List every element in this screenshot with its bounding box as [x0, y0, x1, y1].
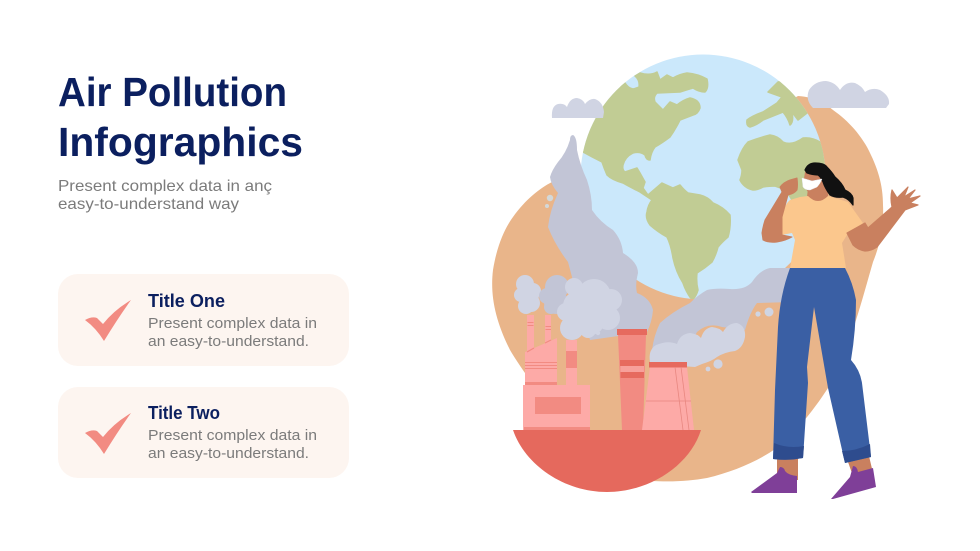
- shirt: [782, 196, 863, 268]
- subtitle: Present complex data in anç: [58, 178, 272, 195]
- subtitle: easy-to-understand way: [58, 196, 239, 213]
- icon: check mark two: [85, 413, 131, 454]
- smoke plume left: [548, 135, 653, 340]
- smoke dots left: [545, 195, 553, 208]
- smoke dots right: [755, 308, 774, 317]
- cooling tower: [642, 362, 694, 430]
- card text one: an easy-to-understand.: [148, 333, 309, 350]
- icon: check mark one: [85, 300, 131, 341]
- continent: the Americas: [583, 71, 731, 299]
- striped chimney tower: [617, 329, 647, 430]
- arm: right: [847, 187, 920, 251]
- card text two: Present complex data in: [148, 427, 317, 444]
- hair: [805, 163, 853, 205]
- ankles: [777, 456, 873, 480]
- title: [58, 69, 303, 165]
- card heading two: Title Two: [148, 403, 220, 423]
- illustration: woman wearing a mask: [751, 163, 920, 499]
- cloud: low right: [650, 323, 745, 367]
- continent: Africa: [737, 134, 825, 200]
- card text two: [148, 427, 317, 462]
- mask: [802, 178, 822, 190]
- illustration: pollution scene: [492, 54, 889, 492]
- shoe: left: [751, 467, 797, 493]
- card heading one: Title One: [148, 291, 225, 311]
- face: [803, 172, 826, 192]
- panel: title one card: [58, 274, 349, 366]
- continent: Europe: [747, 80, 815, 127]
- smoke plume right: [652, 268, 792, 350]
- subtitle: [58, 178, 272, 213]
- title: Infographics: [58, 119, 303, 165]
- title: Air Pollution: [58, 69, 287, 115]
- arm: left: [762, 178, 798, 242]
- cloud: upper left: [552, 98, 604, 118]
- peach background blob: [492, 96, 883, 481]
- panel: title two card: [58, 387, 349, 478]
- cuffs: [773, 443, 871, 463]
- smokestack clouds: [514, 275, 622, 340]
- ground bowl: [513, 430, 701, 492]
- pants: [773, 268, 871, 463]
- card text two: an easy-to-understand.: [148, 445, 309, 462]
- factory: [523, 315, 590, 430]
- cloud dots: [596, 331, 723, 371]
- neck: [807, 188, 828, 204]
- globe: [560, 54, 830, 300]
- shoe: right: [831, 466, 876, 499]
- card text one: Present complex data in: [148, 315, 317, 332]
- card text one: [148, 315, 317, 350]
- cloud: upper right: [808, 81, 889, 108]
